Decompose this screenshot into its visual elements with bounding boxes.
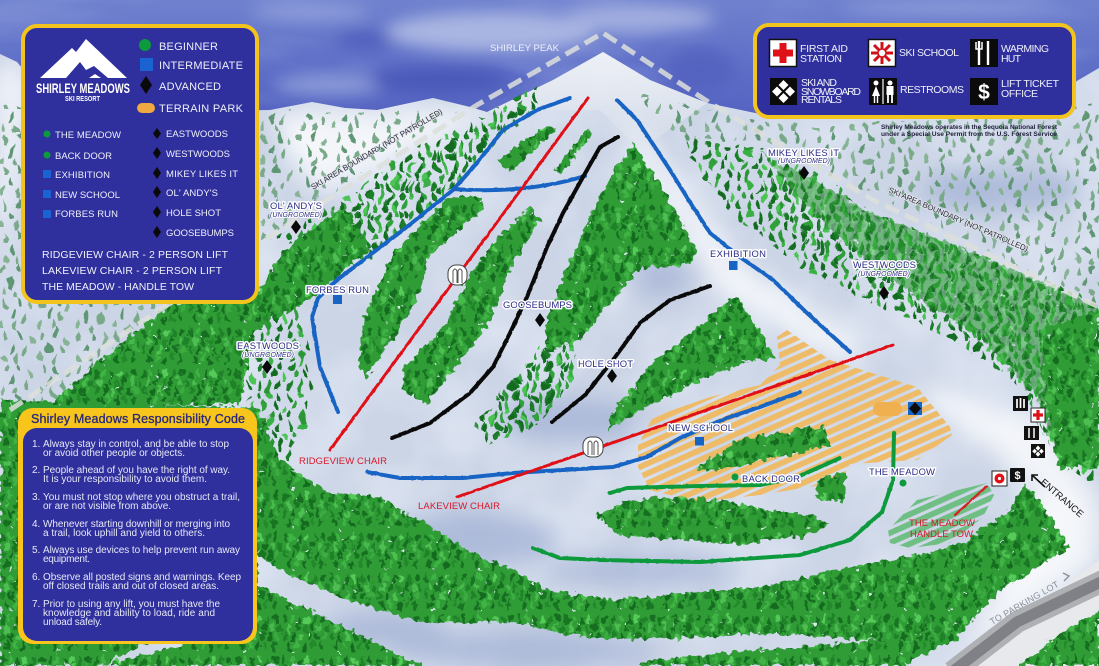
text block: code rules: It is your responsibility to avoid them.	[43, 474, 207, 485]
legend: lift list: THE MEADOW - HANDLE TOW	[42, 281, 194, 293]
trail: New School	[367, 392, 800, 478]
background: sky	[0, 0, 1099, 130]
logo: Shirley Meadows Ski Resort: SKI RESORT	[65, 96, 101, 103]
key: lift ticket office: $	[978, 81, 990, 104]
legend: difficulty key: TERRAIN PARK	[159, 103, 244, 115]
legend: advanced trail list: MIKEY LIKES IT	[166, 169, 238, 180]
forest: main lower band	[0, 400, 1070, 666]
forest: central glade	[473, 340, 578, 445]
entrance arrow and label: ENTRANCE	[1038, 477, 1085, 520]
legend: easier trail list: FORBES RUN	[55, 209, 118, 220]
label: Ridgeview Chair: RIDGEVIEW CHAIR	[299, 456, 387, 467]
text block: code rules: a trail, look uphill and yield to others.	[43, 528, 205, 539]
trail: The Meadow	[533, 433, 894, 562]
key: first aid station: FIRST AID	[800, 43, 848, 55]
text block: code rules: 6.	[32, 572, 40, 583]
key: warming hut: HUT	[1001, 53, 1022, 65]
trail marker: New School: NEW SCHOOL	[668, 423, 733, 434]
text block: forest service note: Shirley Meadows operates in the Sequoia National Forest	[881, 124, 1058, 131]
text block: code rules: You must not stop where you obstruct a trail,	[43, 492, 240, 503]
forest: upper chute islands	[358, 125, 593, 405]
key: ski and snowboard rentals	[770, 77, 861, 106]
key: lift ticket office	[970, 78, 1060, 105]
trail marker: Ol' Andy's: OL' ANDY'S	[270, 201, 322, 212]
legend: advanced trail list: GOOSEBUMPS	[166, 228, 234, 239]
trail marker: Exhibition: EXHIBITION	[710, 249, 766, 260]
ski lifts and trails	[312, 98, 987, 562]
logo: Shirley Meadows Ski Resort	[36, 39, 130, 103]
icon: base lift ticket office: $	[1014, 470, 1021, 482]
trail marker: Mikey Likes It: (UNGROOMED)	[778, 158, 830, 165]
forest: upper right dense band	[760, 152, 1099, 470]
trail marker: Forbes Run	[306, 285, 369, 304]
legend: lift list: RIDGEVIEW CHAIR - 2 PERSON LIFT	[42, 249, 229, 261]
text block: code rules	[32, 439, 241, 628]
trail marker: Forbes Run: FORBES RUN	[306, 285, 369, 296]
trail marker: Mikey Likes It	[768, 148, 839, 180]
text block: code rules: People ahead of you have the right of way.	[43, 465, 230, 476]
text block: forest service note: under a Special Use Permit from the U.S. Forest Service	[881, 131, 1057, 138]
trail: Hole Shot	[552, 286, 710, 422]
legend: lift list	[42, 249, 229, 293]
text block: code rules: 5.	[32, 545, 40, 556]
trail marker: The Meadow: THE MEADOW	[869, 467, 935, 478]
key: ski and snowboard rentals: RENTALS	[801, 94, 842, 106]
forest: upper right band	[683, 140, 1099, 480]
forests: lower slopes	[0, 310, 1099, 666]
icon: Ridgeview chair	[448, 265, 467, 285]
forest: back door island	[595, 470, 845, 545]
icon: base ski school	[992, 471, 1007, 486]
text block: code rules: Always stay in control, and be able to stop	[43, 439, 229, 450]
key: restrooms	[869, 78, 964, 105]
text block: code rules: 2.	[32, 465, 40, 476]
heading: responsibility code: Shirley Meadows Responsibility Code	[31, 412, 245, 426]
label: ski area boundary right: SKI AREA BOUNDARY (NOT PATROLLED)	[887, 186, 1030, 254]
faded out-of-bounds trees	[0, 95, 1099, 420]
label: Lakeview Chair: LAKEVIEW CHAIR	[418, 501, 500, 512]
legend: difficulty key	[137, 39, 244, 115]
key: ski school: SKI SCHOOL	[899, 47, 959, 59]
forest: left dense slope	[50, 205, 370, 405]
trail: connector	[453, 176, 585, 190]
forest: eastwoods glade	[240, 300, 312, 470]
handle tow hatching	[888, 483, 994, 548]
trail marker: Goosebumps	[503, 300, 572, 327]
text block: code rules: 1.	[32, 439, 40, 450]
legend: lift list: LAKEVIEW CHAIR - 2 PERSON LIFT	[42, 265, 223, 277]
icon: terrain park marker	[873, 402, 922, 416]
forest: lower triangle	[607, 295, 775, 430]
text block: code rules: 3.	[32, 492, 40, 503]
trail marker: The Meadow	[869, 467, 935, 486]
key: ski and snowboard rentals: SKI AND	[801, 77, 837, 89]
text block: forest service note	[881, 124, 1058, 138]
key: first aid station	[770, 40, 848, 66]
label: ski area boundary left: SKI AREA BOUNDARY (NOT PATROLLED)	[309, 107, 444, 192]
trail marker: Eastwoods: (UNGROOMED)	[242, 352, 294, 359]
icon: base lift ticket office	[1010, 468, 1025, 482]
key: first aid station: STATION	[800, 53, 842, 65]
forests	[50, 125, 1099, 470]
text block: code rules: knowledge and ability to load, ride and	[43, 608, 215, 619]
legend: advanced trail list: HOLE SHOT	[166, 208, 221, 219]
trail marker: Eastwoods	[237, 341, 299, 374]
lift: Lakeview Chair	[457, 345, 893, 497]
legend: advanced trail list	[153, 128, 238, 239]
terrain park hatching	[638, 330, 952, 502]
text block: code rules: Always use devices to help prevent run away	[43, 545, 240, 556]
text block: code rules: off closed trails and out of closed areas.	[43, 581, 219, 592]
trail marker: Eastwoods: EASTWOODS	[237, 341, 299, 352]
lift: Ridgeview Chair	[330, 98, 588, 450]
icon: base rentals	[1031, 444, 1045, 458]
text block: code rules: or avoid other people or objects.	[43, 448, 185, 459]
forest: lower left band	[100, 585, 425, 666]
trail marker: Hole Shot: HOLE SHOT	[578, 359, 633, 370]
trail marker: Westwoods: (UNGROOMED)	[858, 271, 910, 278]
panel: services key	[755, 25, 1074, 117]
legend: easier trail list: NEW SCHOOL	[55, 190, 120, 201]
legend: advanced trail list: WESTWOODS	[166, 149, 230, 160]
label: Shirley Peak: SHIRLEY PEAK	[490, 43, 560, 54]
text block: code rules: unload safely.	[43, 617, 102, 628]
panel: responsibility code	[18, 408, 257, 644]
trail marker: Exhibition	[710, 249, 766, 270]
legend: difficulty key: BEGINNER	[159, 41, 218, 53]
key: warming hut: WARMING	[1001, 43, 1049, 55]
trail marker: Mikey Likes It: MIKEY LIKES IT	[768, 148, 839, 159]
legend: difficulty key: ADVANCED	[159, 81, 221, 93]
text block: code rules: 7.	[32, 599, 40, 610]
label: The Meadow Handle Tow: THE MEADOW	[909, 518, 975, 529]
trail marker: New School	[668, 423, 733, 446]
text block: code rules: Whenever starting downhill or merging into	[43, 519, 230, 530]
text block: code rules: Observe all posted signs and warnings. Keep	[43, 572, 241, 583]
legend: difficulty key: INTERMEDIATE	[159, 60, 243, 72]
forest: central triangle	[545, 143, 697, 350]
panel: legend	[23, 26, 257, 302]
text block: code rules: or are not visible from above.	[43, 501, 171, 512]
trail marker: Back Door: BACK DOOR	[742, 474, 800, 485]
icon: base restrooms	[1013, 396, 1028, 411]
forest: bottom right	[1018, 610, 1099, 666]
label: The Meadow Handle Tow: HANDLE TOW	[910, 529, 973, 540]
trail marker: Westwoods: WESTWOODS	[853, 260, 916, 271]
trail: Back Door	[610, 458, 840, 493]
trail marker: Westwoods	[853, 260, 916, 300]
lift: Meadow handle tow	[955, 486, 987, 515]
key: ski and snowboard rentals: SNOWBOARD	[801, 86, 861, 98]
key: lift ticket office: LIFT TICKET	[1001, 78, 1060, 90]
out of bounds boundary line	[10, 33, 1099, 410]
key: warming hut	[970, 39, 1049, 67]
label: to parking lot: TO PARKING LOT	[988, 579, 1061, 627]
text block: code rules: Prior to using any lift, you must have the	[43, 599, 220, 610]
forest: right side	[1040, 310, 1099, 470]
legend: advanced trail list: EASTWOODS	[166, 129, 228, 140]
forest: park island	[695, 425, 830, 470]
road to parking lot	[952, 580, 1099, 666]
forest: sparse upper left band	[270, 85, 537, 257]
trail: Exhibition	[617, 100, 850, 352]
icon: Lakeview chair	[583, 437, 603, 457]
legend: easier trail list: THE MEADOW	[55, 130, 121, 141]
key: ski school	[868, 40, 959, 66]
forests: open glades	[240, 85, 1099, 480]
legend: easier trail list: EXHIBITION	[55, 170, 110, 181]
legend: easier trail list	[43, 130, 121, 220]
trail marker: Ol' Andy's: (UNGROOMED)	[270, 212, 322, 219]
trail: Forbes Run	[312, 98, 570, 412]
trail marker: Hole Shot	[578, 359, 633, 383]
key: restrooms: RESTROOMS	[900, 84, 964, 96]
trail marker: Ol' Andy's	[270, 201, 322, 234]
forest: bottom centre	[640, 640, 905, 666]
label: The Meadow Handle Tow	[909, 518, 975, 540]
icon: base warming hut	[1024, 426, 1039, 440]
trail: Goosebumps	[392, 137, 618, 438]
icon: base first aid	[1031, 408, 1045, 422]
logo: Shirley Meadows Ski Resort: SHIRLEY MEADOWS	[36, 80, 130, 96]
key: lift ticket office: OFFICE	[1001, 88, 1038, 100]
text block: code rules: 4.	[32, 519, 40, 530]
legend: easier trail list: BACK DOOR	[55, 151, 112, 162]
trail marker: Goosebumps: GOOSEBUMPS	[503, 300, 572, 311]
legend: advanced trail list: OL' ANDY'S	[166, 188, 218, 199]
text block: code rules: equipment.	[43, 554, 90, 565]
